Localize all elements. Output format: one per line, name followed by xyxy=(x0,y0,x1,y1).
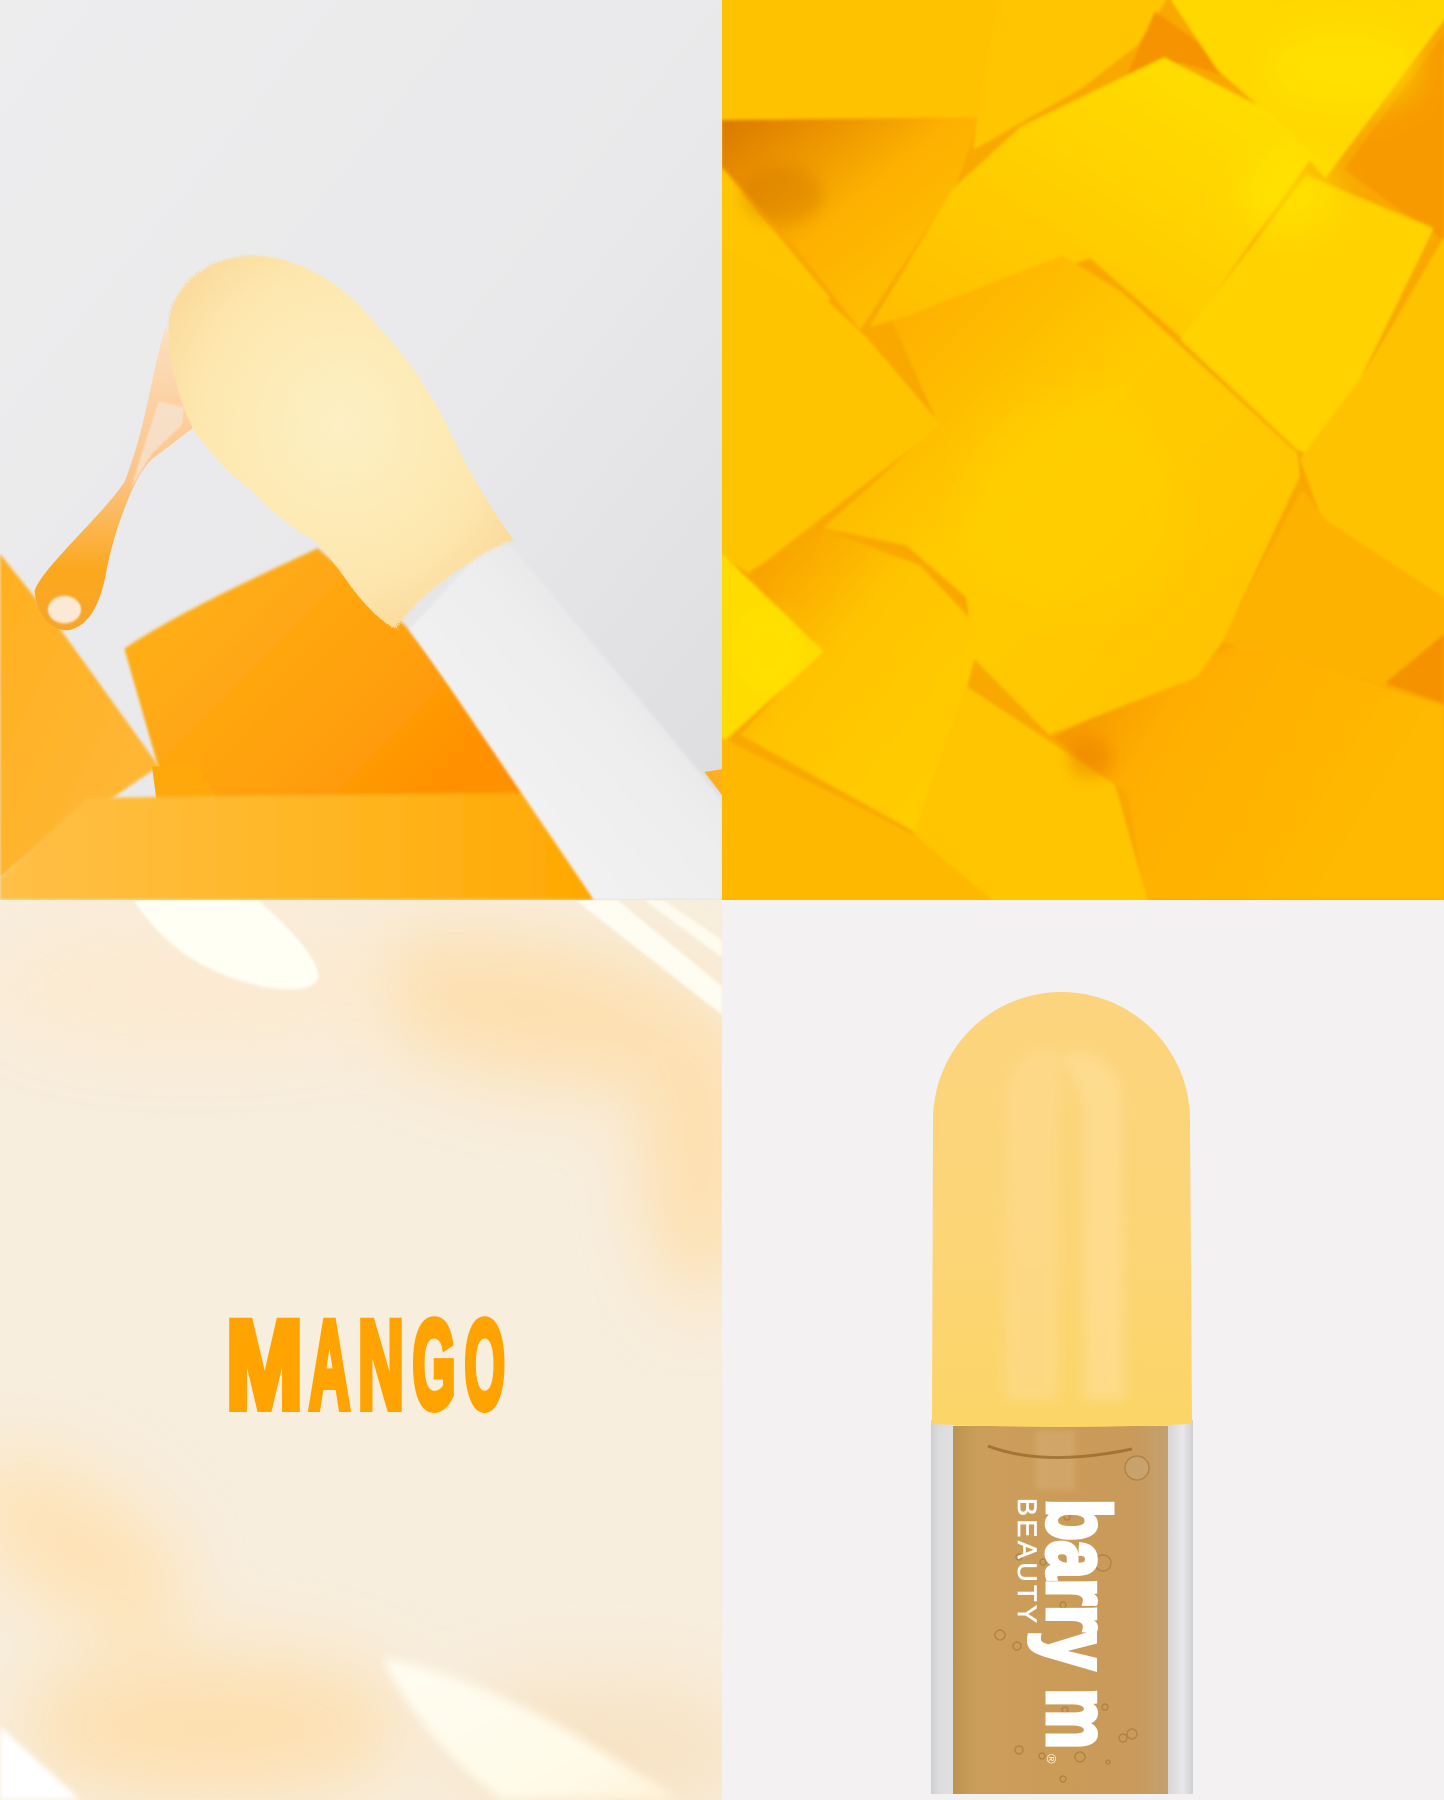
glossy light reflections xyxy=(0,900,722,1800)
meniscus line xyxy=(988,1446,1132,1458)
glass tube xyxy=(931,1420,1193,1794)
product name: MANGO: G xyxy=(412,1296,456,1435)
panel: mango cubes photo xyxy=(722,0,1444,900)
juice between cubes xyxy=(152,766,216,801)
bright highlights and shade on fruit xyxy=(736,29,1422,778)
corner of fruit at right edge xyxy=(705,769,722,795)
white wand shaft xyxy=(410,545,722,900)
front mango cube xyxy=(0,792,594,900)
air bubbles xyxy=(995,1456,1149,1782)
gloss drip and droplet xyxy=(35,327,193,630)
cap highlight xyxy=(1005,1049,1060,1400)
product name: MANGO: N xyxy=(358,1296,404,1435)
flocked applicator tip xyxy=(168,255,513,629)
panel: gloss swatch with product name: O xyxy=(464,1296,505,1435)
logo: barry m beauty: BEAUTY xyxy=(1012,1498,1042,1623)
mango chunks xyxy=(722,0,1444,900)
panel: gloss swatch with product name xyxy=(0,900,760,1800)
product name: MANGO: M xyxy=(226,1296,303,1435)
back mango cube xyxy=(124,548,539,801)
product name: MANGO: A xyxy=(309,1296,350,1435)
panel: applicator wand photo xyxy=(0,0,722,900)
gloss liquid xyxy=(953,1426,1168,1794)
warm peach tones xyxy=(0,907,760,1800)
yellow cap xyxy=(925,985,1200,1430)
left mango cube xyxy=(0,554,159,878)
logo: barry m beauty: ® xyxy=(1044,1754,1059,1764)
panel: lip gloss product shot xyxy=(931,992,1193,1794)
